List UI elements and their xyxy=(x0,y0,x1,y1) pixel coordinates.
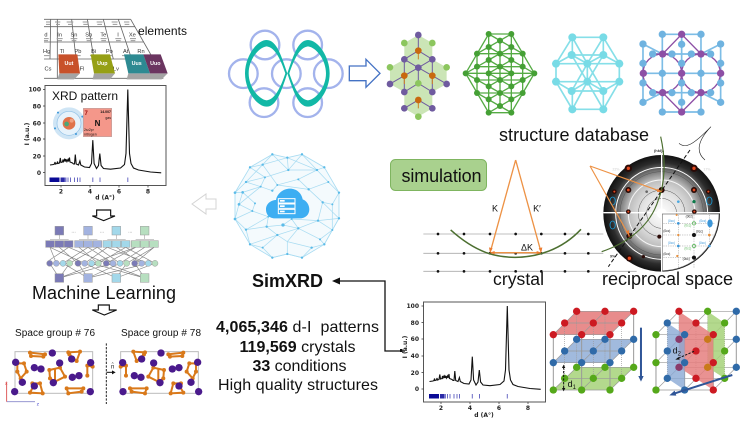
diagram: Ewald sphere on crystal: ΔK xyxy=(521,243,533,253)
diagram: lattice planes d2 xyxy=(652,308,740,396)
chart: XRD pattern: 20 xyxy=(33,154,41,160)
chart: d-I pattern: 0 xyxy=(415,386,419,393)
chart: XRD pattern: 0 xyxy=(37,170,41,177)
periodic table grid: Cs xyxy=(45,66,52,72)
chart: d-I pattern: 100 xyxy=(406,303,419,310)
periodic table grid: d xyxy=(44,32,48,38)
heading: structure database: structure database xyxy=(499,125,649,145)
periodic table grid xyxy=(43,19,168,79)
diagram: diffraction pattern: (0cc) xyxy=(699,219,706,223)
chart: XRD pattern: 60 xyxy=(33,120,41,128)
periodic table grid: Sn xyxy=(71,32,77,38)
chart: d-I pattern: 4 xyxy=(468,405,472,412)
diagram: Ewald sphere on crystal: K xyxy=(492,204,498,214)
network cloud: SimXRD icon xyxy=(234,153,340,259)
arrow: logo to structures xyxy=(349,59,380,87)
diagram: Ewald sphere on crystal: K′ xyxy=(533,204,541,214)
diagram: diffraction pattern: (0cc) xyxy=(696,230,703,234)
periodic table grid: Fl xyxy=(80,66,84,72)
neural network diagram: ... xyxy=(100,229,104,235)
chart: d-I pattern: 60 xyxy=(411,336,419,343)
chart: XRD pattern: 100 xyxy=(28,86,41,94)
crystal structure: space group 76: x xyxy=(5,381,8,387)
chart: d-I pattern: I (a.u.) xyxy=(402,335,409,358)
divider with mirror normal: n̂ xyxy=(111,363,114,370)
diagram: diffraction pattern: (0cc) xyxy=(683,257,690,261)
element card: nitrogen: 14.007 xyxy=(100,110,111,114)
chart: XRD pattern xyxy=(24,86,166,202)
structure: blue and purple lattice xyxy=(639,31,724,116)
chart: XRD pattern: d (A°) xyxy=(95,194,115,202)
periodic table grid: At xyxy=(123,49,129,55)
element tile: Uuo: Uuo xyxy=(150,61,161,67)
heading: elements: elements xyxy=(138,24,187,38)
structure: green lattice xyxy=(463,31,537,116)
divider with mirror normal xyxy=(106,343,116,404)
diagram: lattice planes d2: 2 xyxy=(678,352,682,358)
heading: SimXRD: SimXRD xyxy=(252,271,323,291)
element tile: Uut: Uut xyxy=(65,61,74,67)
diagram: diffraction pattern: (0cc) xyxy=(668,241,675,245)
diagram: diffraction pattern: (0cc) xyxy=(684,224,691,228)
diagram: lattice planes d1: 1 xyxy=(573,385,577,391)
diagram: diffraction pattern: (hkl)ₙ xyxy=(654,148,664,153)
stats text block: 119,569 crystals xyxy=(240,339,356,356)
diagram: diffraction pattern: (002) xyxy=(686,214,693,218)
element card: nitrogen: N xyxy=(95,119,101,128)
element card: nitrogen: 2s²2p³ xyxy=(84,128,95,132)
diagram: diffraction pattern: 9% xyxy=(610,254,616,258)
chart: d-I pattern: 2 xyxy=(439,405,443,412)
chart: XRD pattern: 8 xyxy=(146,188,150,196)
chart: XRD pattern: 2 xyxy=(59,188,63,196)
periodic table grid: Hg xyxy=(43,49,50,55)
structure: cyan lattice xyxy=(552,33,623,113)
crystal structure: space group 76: z xyxy=(37,401,40,407)
periodic table grid: Po xyxy=(106,49,113,55)
label: space group 78: Space group # 78 xyxy=(121,328,201,339)
logo: circles and teal lobes xyxy=(229,31,343,117)
periodic table grid: Pb xyxy=(75,49,81,55)
chart: XRD pattern: 40 xyxy=(33,136,41,144)
crystal structure: space group 78 xyxy=(119,349,202,395)
periodic table grid: Bi xyxy=(91,49,96,55)
element card: nitrogen: gas xyxy=(105,116,111,120)
arrow: down to space groups xyxy=(92,305,117,315)
diagram: diffraction pattern xyxy=(590,127,720,272)
stats text block xyxy=(216,319,379,394)
neural network diagram xyxy=(46,226,158,282)
arrow: down to network xyxy=(92,210,115,221)
diagram: diffraction pattern: (0cc) xyxy=(668,219,675,223)
heading: Machine Learning: Machine Learning xyxy=(32,283,176,303)
stats text block: 4,065,346 d-I patterns xyxy=(216,319,379,336)
arrow: pattern to SimXRD xyxy=(332,278,405,351)
chart: XRD pattern: 4 xyxy=(88,188,92,196)
diagram: diffraction pattern: (0cc) xyxy=(699,241,706,245)
chart: d-I pattern: 8 xyxy=(526,405,530,412)
arrow: SimXRD to machine learning xyxy=(192,194,216,214)
stats text block: High quality structures xyxy=(218,377,378,394)
diagram: diffraction pattern: 22% xyxy=(612,168,620,172)
diagram: diffraction pattern: 17% xyxy=(703,168,711,172)
periodic table grid: Sb xyxy=(85,32,92,38)
diagram: diffraction pattern: (0cc) xyxy=(663,252,670,256)
icon: atom xyxy=(53,107,85,139)
chart: d-I pattern: 80 xyxy=(411,320,419,327)
chart: d-I pattern: 40 xyxy=(411,353,419,360)
periodic table grid: Xe xyxy=(129,32,136,38)
chart: d-I pattern xyxy=(400,302,546,419)
heading: reciprocal space: reciprocal space xyxy=(602,269,733,289)
diagram: lattice planes d1 xyxy=(550,308,644,394)
neural network diagram: ... xyxy=(128,229,133,235)
stats text block: 33 conditions xyxy=(252,358,346,375)
crystal structure: space group 76 xyxy=(5,349,95,407)
label: space group 76: Space group # 76 xyxy=(15,328,95,339)
diagram: diffraction pattern: (0cc) xyxy=(684,246,691,250)
periodic table grid: Lv xyxy=(113,66,119,72)
label: simulation: simulation xyxy=(402,166,482,186)
structure: octahedral crystal xyxy=(387,32,450,120)
diagram: diffraction pattern: (0cc) xyxy=(663,229,670,233)
chart: d-I pattern: d (A°) xyxy=(474,412,494,419)
diagram: lattice planes d1: d xyxy=(568,379,573,389)
chart: XRD pattern: 80 xyxy=(33,104,41,110)
chart: d-I pattern: 20 xyxy=(411,370,419,377)
periodic table grid: Tl xyxy=(60,49,64,55)
element card: nitrogen: 7 xyxy=(84,111,88,117)
periodic table grid: Te xyxy=(100,32,106,38)
chart: XRD pattern: I (a.u.) xyxy=(24,122,31,145)
element tile: Uup: Uup xyxy=(97,61,108,67)
chart: d-I pattern: 6 xyxy=(497,405,501,412)
periodic table grid: In xyxy=(57,32,62,38)
heading: XRD pattern: XRD pattern xyxy=(52,89,118,103)
label: simulation xyxy=(390,160,486,190)
element card: nitrogen xyxy=(83,108,112,137)
heading: crystal: crystal xyxy=(493,269,544,289)
diagram: Ewald sphere on crystal xyxy=(423,160,637,273)
diagram: lattice planes d2: d xyxy=(673,346,678,356)
panel: periodic table elements xyxy=(43,19,168,79)
periodic table grid: I xyxy=(117,32,119,38)
element tile: Uus: Uus xyxy=(132,61,142,67)
neural network diagram: ... xyxy=(71,229,76,235)
element card: nitrogen: nitrogen xyxy=(84,132,97,136)
periodic table grid: Rn xyxy=(137,49,145,55)
chart: XRD pattern: 6 xyxy=(117,188,121,196)
